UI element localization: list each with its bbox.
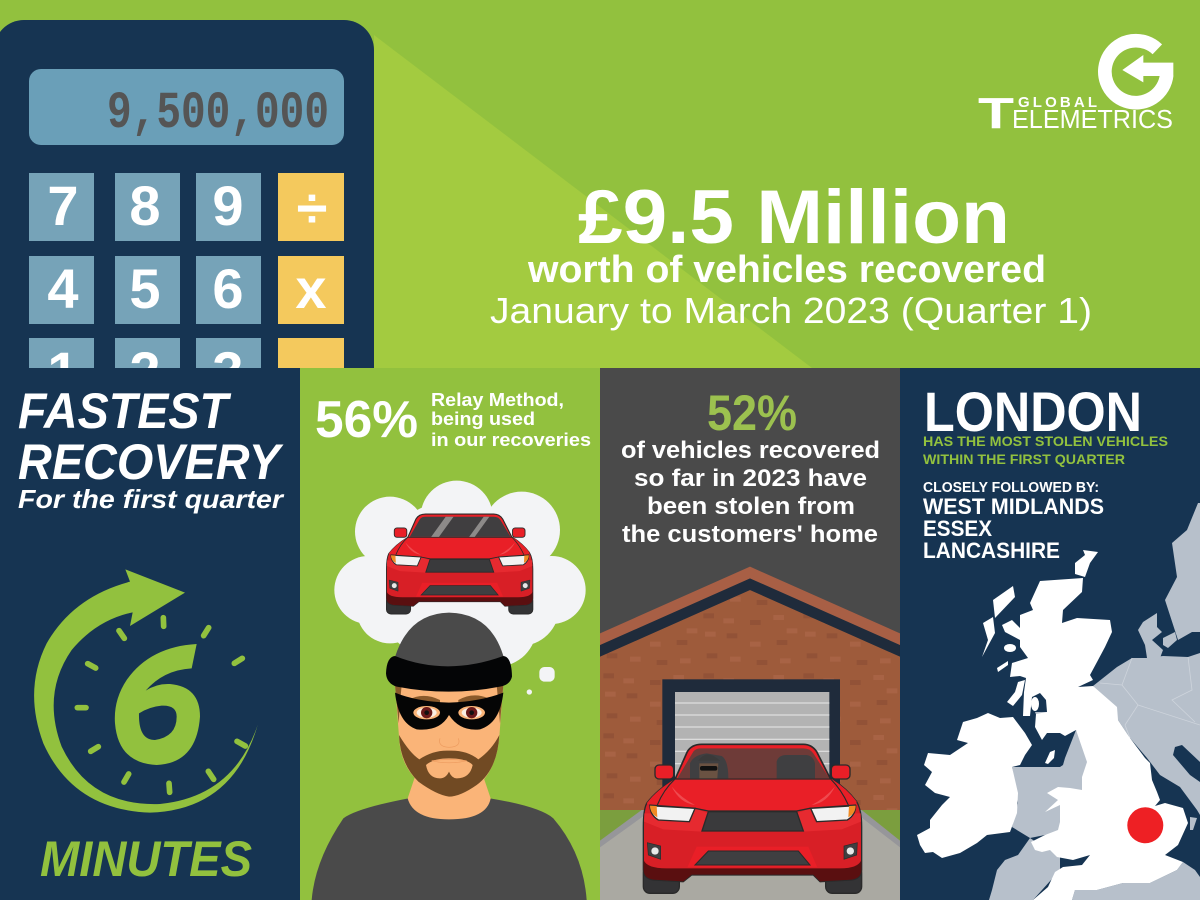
- headline: [490, 175, 1092, 331]
- country borders: [1100, 657, 1200, 738]
- main figure: £9.5 Million: [578, 175, 1010, 260]
- icon: six minute clock: [34, 569, 258, 813]
- stolen from home text: the customers' home: [622, 521, 878, 548]
- followed by list: CLOSELY FOLLOWED BY:: [923, 480, 1099, 496]
- calculator keypad: ÷: [297, 176, 327, 239]
- panel: London: [900, 368, 1200, 900]
- thief beanie: [386, 613, 512, 692]
- London subheading: [923, 433, 1168, 467]
- calculator keypad: 2: [129, 340, 161, 403]
- stolen from home text: [621, 437, 880, 548]
- calculator keypad: 6: [212, 257, 244, 320]
- Great Britain: [1002, 578, 1188, 900]
- calculator keypad: 3: [212, 340, 244, 403]
- heading: fastest recovery: For the first quarter: [18, 484, 285, 514]
- calculator keypad: 7: [47, 174, 79, 237]
- statistic: 52%: 52%: [707, 385, 797, 441]
- London marker: [1127, 807, 1163, 843]
- calculator: [0, 20, 374, 420]
- Ireland: [917, 713, 1032, 858]
- south west peninsula shading: [989, 838, 1060, 900]
- followed by list: LANCASHIRE: [923, 538, 1060, 563]
- panel: relay method: [300, 368, 600, 900]
- getaway car: [643, 744, 862, 893]
- London subheading: HAS THE MOST STOLEN VEHICLES: [923, 433, 1168, 449]
- stolen from home text: of vehicles recovered: [621, 437, 880, 464]
- calculator display: [29, 69, 344, 145]
- thief neck: [408, 777, 491, 819]
- logo wordmark: ELEMETRICS: [1012, 104, 1173, 134]
- stolen from home text: been stolen from: [647, 493, 855, 520]
- subheading: worth of vehicles recovered: [527, 249, 1046, 291]
- calculator keypad: [29, 173, 344, 406]
- logo: Global Telemetrics: [978, 41, 1173, 138]
- logo wordmark: T: [978, 89, 1014, 138]
- Loch shading: [1035, 712, 1047, 724]
- followed by list: WEST MIDLANDS: [923, 494, 1104, 519]
- relay method text: being used: [431, 409, 535, 429]
- logo G mark: [1105, 41, 1173, 103]
- relay method text: Relay Method,: [431, 390, 564, 410]
- relay method text: in our recoveries: [431, 430, 591, 450]
- ground and driveway: [600, 810, 900, 900]
- thief torso: [312, 798, 587, 900]
- London subheading: WITHIN THE FIRST QUARTER: [923, 451, 1125, 467]
- statistic: 56%: 56%: [315, 391, 418, 449]
- heading: fastest recovery: FASTEST: [18, 383, 232, 439]
- calculator keypad: 1: [47, 340, 79, 403]
- minutes label: MINUTES: [40, 831, 252, 887]
- date range: January to March 2023 (Quarter 1): [490, 290, 1092, 331]
- relay method text: [431, 390, 591, 450]
- fascia board: [600, 578, 900, 657]
- garage illustration: [600, 567, 900, 900]
- calculator keypad: 9: [212, 174, 244, 237]
- calculator keypad: 5: [129, 257, 161, 320]
- panel: fastest recovery: [0, 368, 300, 900]
- thief head: [395, 683, 503, 797]
- calculator keypad: 4: [47, 257, 79, 320]
- logo wordmark: [978, 89, 1173, 138]
- thief thinking of car illustration: [312, 481, 587, 900]
- calculator keypad: x: [295, 257, 327, 320]
- heading: fastest recovery: [18, 383, 285, 514]
- Baltic inlet: [1173, 745, 1200, 782]
- followed by list: ESSEX: [923, 516, 992, 541]
- car in thought bubble: [386, 514, 533, 614]
- logo wordmark: GLOBAL: [1018, 94, 1097, 111]
- calculator body: [0, 20, 374, 420]
- map of UK and Ireland: [917, 503, 1200, 900]
- followed by list: [923, 480, 1104, 563]
- heading: London: LONDON: [924, 380, 1142, 443]
- western Britain shading: [1012, 730, 1090, 838]
- heading: fastest recovery: RECOVERY: [18, 434, 284, 490]
- brick wall: [600, 590, 900, 810]
- roof tiles: [600, 567, 900, 645]
- calculator display: 9,500,000: [107, 84, 329, 143]
- thought bubble: [334, 481, 586, 695]
- stolen from home text: so far in 2023 have: [634, 465, 867, 492]
- Scottish islands: [982, 550, 1098, 764]
- light green diagonal band: [374, 35, 812, 368]
- calculator keypad: 8: [129, 174, 161, 237]
- mainland Europe: [1072, 503, 1200, 900]
- garage door: [662, 679, 840, 790]
- panel: stolen from home: [600, 368, 900, 900]
